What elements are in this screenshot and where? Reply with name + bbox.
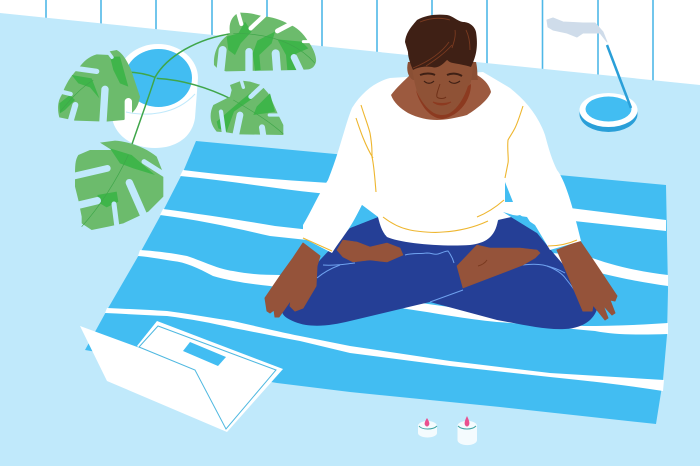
face [412,60,473,118]
trouser seams [317,251,575,302]
rug stripe 1 [180,170,666,231]
hair [405,15,477,70]
incense burner [547,18,638,132]
right foot [457,245,540,288]
rug gap under right arm [505,182,513,202]
hair strands [413,18,470,68]
leaf: bottom [75,141,163,230]
rug stripe 3 [138,250,668,335]
leaf: right [211,81,283,135]
smoke [547,18,607,42]
rug gaps between arm and legs [350,205,537,233]
rug stripe 4 [105,308,664,391]
candle: tall [458,416,477,445]
eyebrows [420,74,462,76]
laptop [80,321,283,432]
candle: short [418,418,437,438]
legs [282,212,598,329]
neck [391,75,491,120]
leaf: top right [214,13,316,71]
person meditating [265,15,617,329]
laptop base [137,321,283,432]
laptop trackpad [183,342,226,366]
wall with vertical panel lines [0,0,700,90]
left foot [337,240,403,262]
laptop lid [80,326,227,432]
plant pot [113,44,198,148]
sweater seams [303,105,577,251]
closed eyes [424,81,460,83]
incense dish [580,96,638,132]
head [405,15,478,119]
nose [437,84,446,98]
ears [407,62,478,80]
candles [418,416,477,445]
right hand [557,241,617,320]
left hand [265,243,320,317]
sweater [303,72,581,253]
mouth [433,102,451,105]
rug stripe 2 [160,209,668,286]
incense stick [607,45,631,108]
jaw shadow [416,84,471,119]
plant stems [93,33,233,155]
laptop outlines [139,326,276,429]
leaf: left [58,50,140,122]
rug [85,141,668,424]
potted plant [58,13,316,230]
